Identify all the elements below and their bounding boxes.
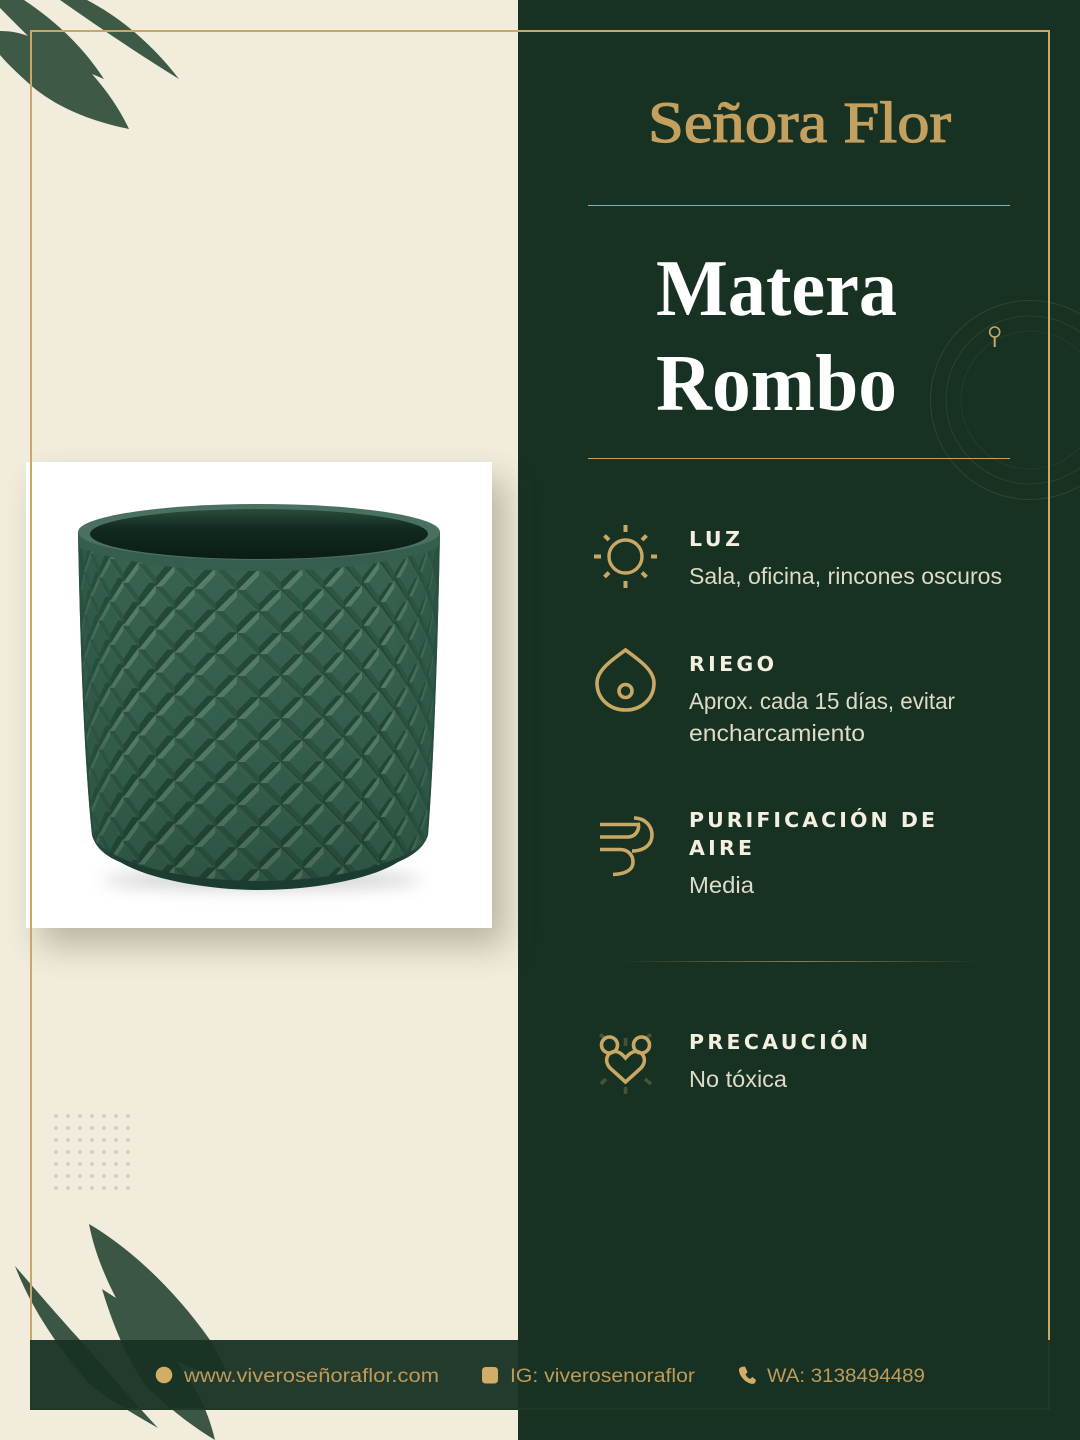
footer: web: www.viveroseñoraflor.com	[183, 1366, 439, 1387]
footer: instagram: IG: viverosenoraflor	[510, 1366, 696, 1387]
icon: phone	[739, 1366, 756, 1384]
label: luz: LUZ	[689, 527, 740, 551]
care item: luz	[594, 525, 1002, 589]
text: luz: Sala, oficina, rincones oscuros	[689, 563, 1002, 589]
dot grid pattern	[54, 1114, 130, 1190]
icon: heart with circles	[600, 1034, 651, 1094]
dark green panel	[518, 0, 1080, 1440]
text: purificación: Media	[689, 872, 754, 898]
decorative concentric circles with pin	[930, 300, 1080, 500]
text: precaución: No tóxica	[689, 1066, 787, 1092]
label: purificación de aire: AIRE	[689, 836, 752, 860]
divider fading	[620, 961, 980, 962]
icon: instagram square	[482, 1367, 498, 1384]
product photo card: green diamond pot	[26, 462, 506, 946]
product title: Matera	[656, 245, 897, 333]
icon: web dot	[156, 1367, 172, 1383]
care item: purificación de aire	[600, 807, 935, 898]
icon: sun	[594, 525, 657, 588]
label: precaución: PRECAUCIÓN	[689, 1029, 868, 1054]
footer: whatsapp: WA: 3138494489	[767, 1366, 925, 1387]
divider below title	[588, 458, 1010, 459]
care item: riego	[597, 650, 955, 746]
icon: water drop	[597, 650, 654, 710]
brand heading: Señora Flor	[648, 90, 951, 155]
icon: wind	[600, 818, 652, 874]
text: riego: Aprox. cada 15 días, evitar	[689, 688, 955, 714]
care item: precaución	[600, 1029, 868, 1094]
product title: Rombo	[656, 340, 897, 428]
label: riego: RIEGO	[689, 652, 774, 676]
footer bar	[30, 1340, 1050, 1410]
decorative leaves: top left	[0, 0, 179, 129]
divider top	[588, 205, 1010, 206]
text: riego: encharcamiento	[689, 720, 865, 746]
label: purificación de aire: PURIFICACIÓN DE	[689, 807, 935, 832]
cream background panel	[0, 0, 518, 1440]
decorative leaves: bottom left	[15, 1224, 230, 1440]
